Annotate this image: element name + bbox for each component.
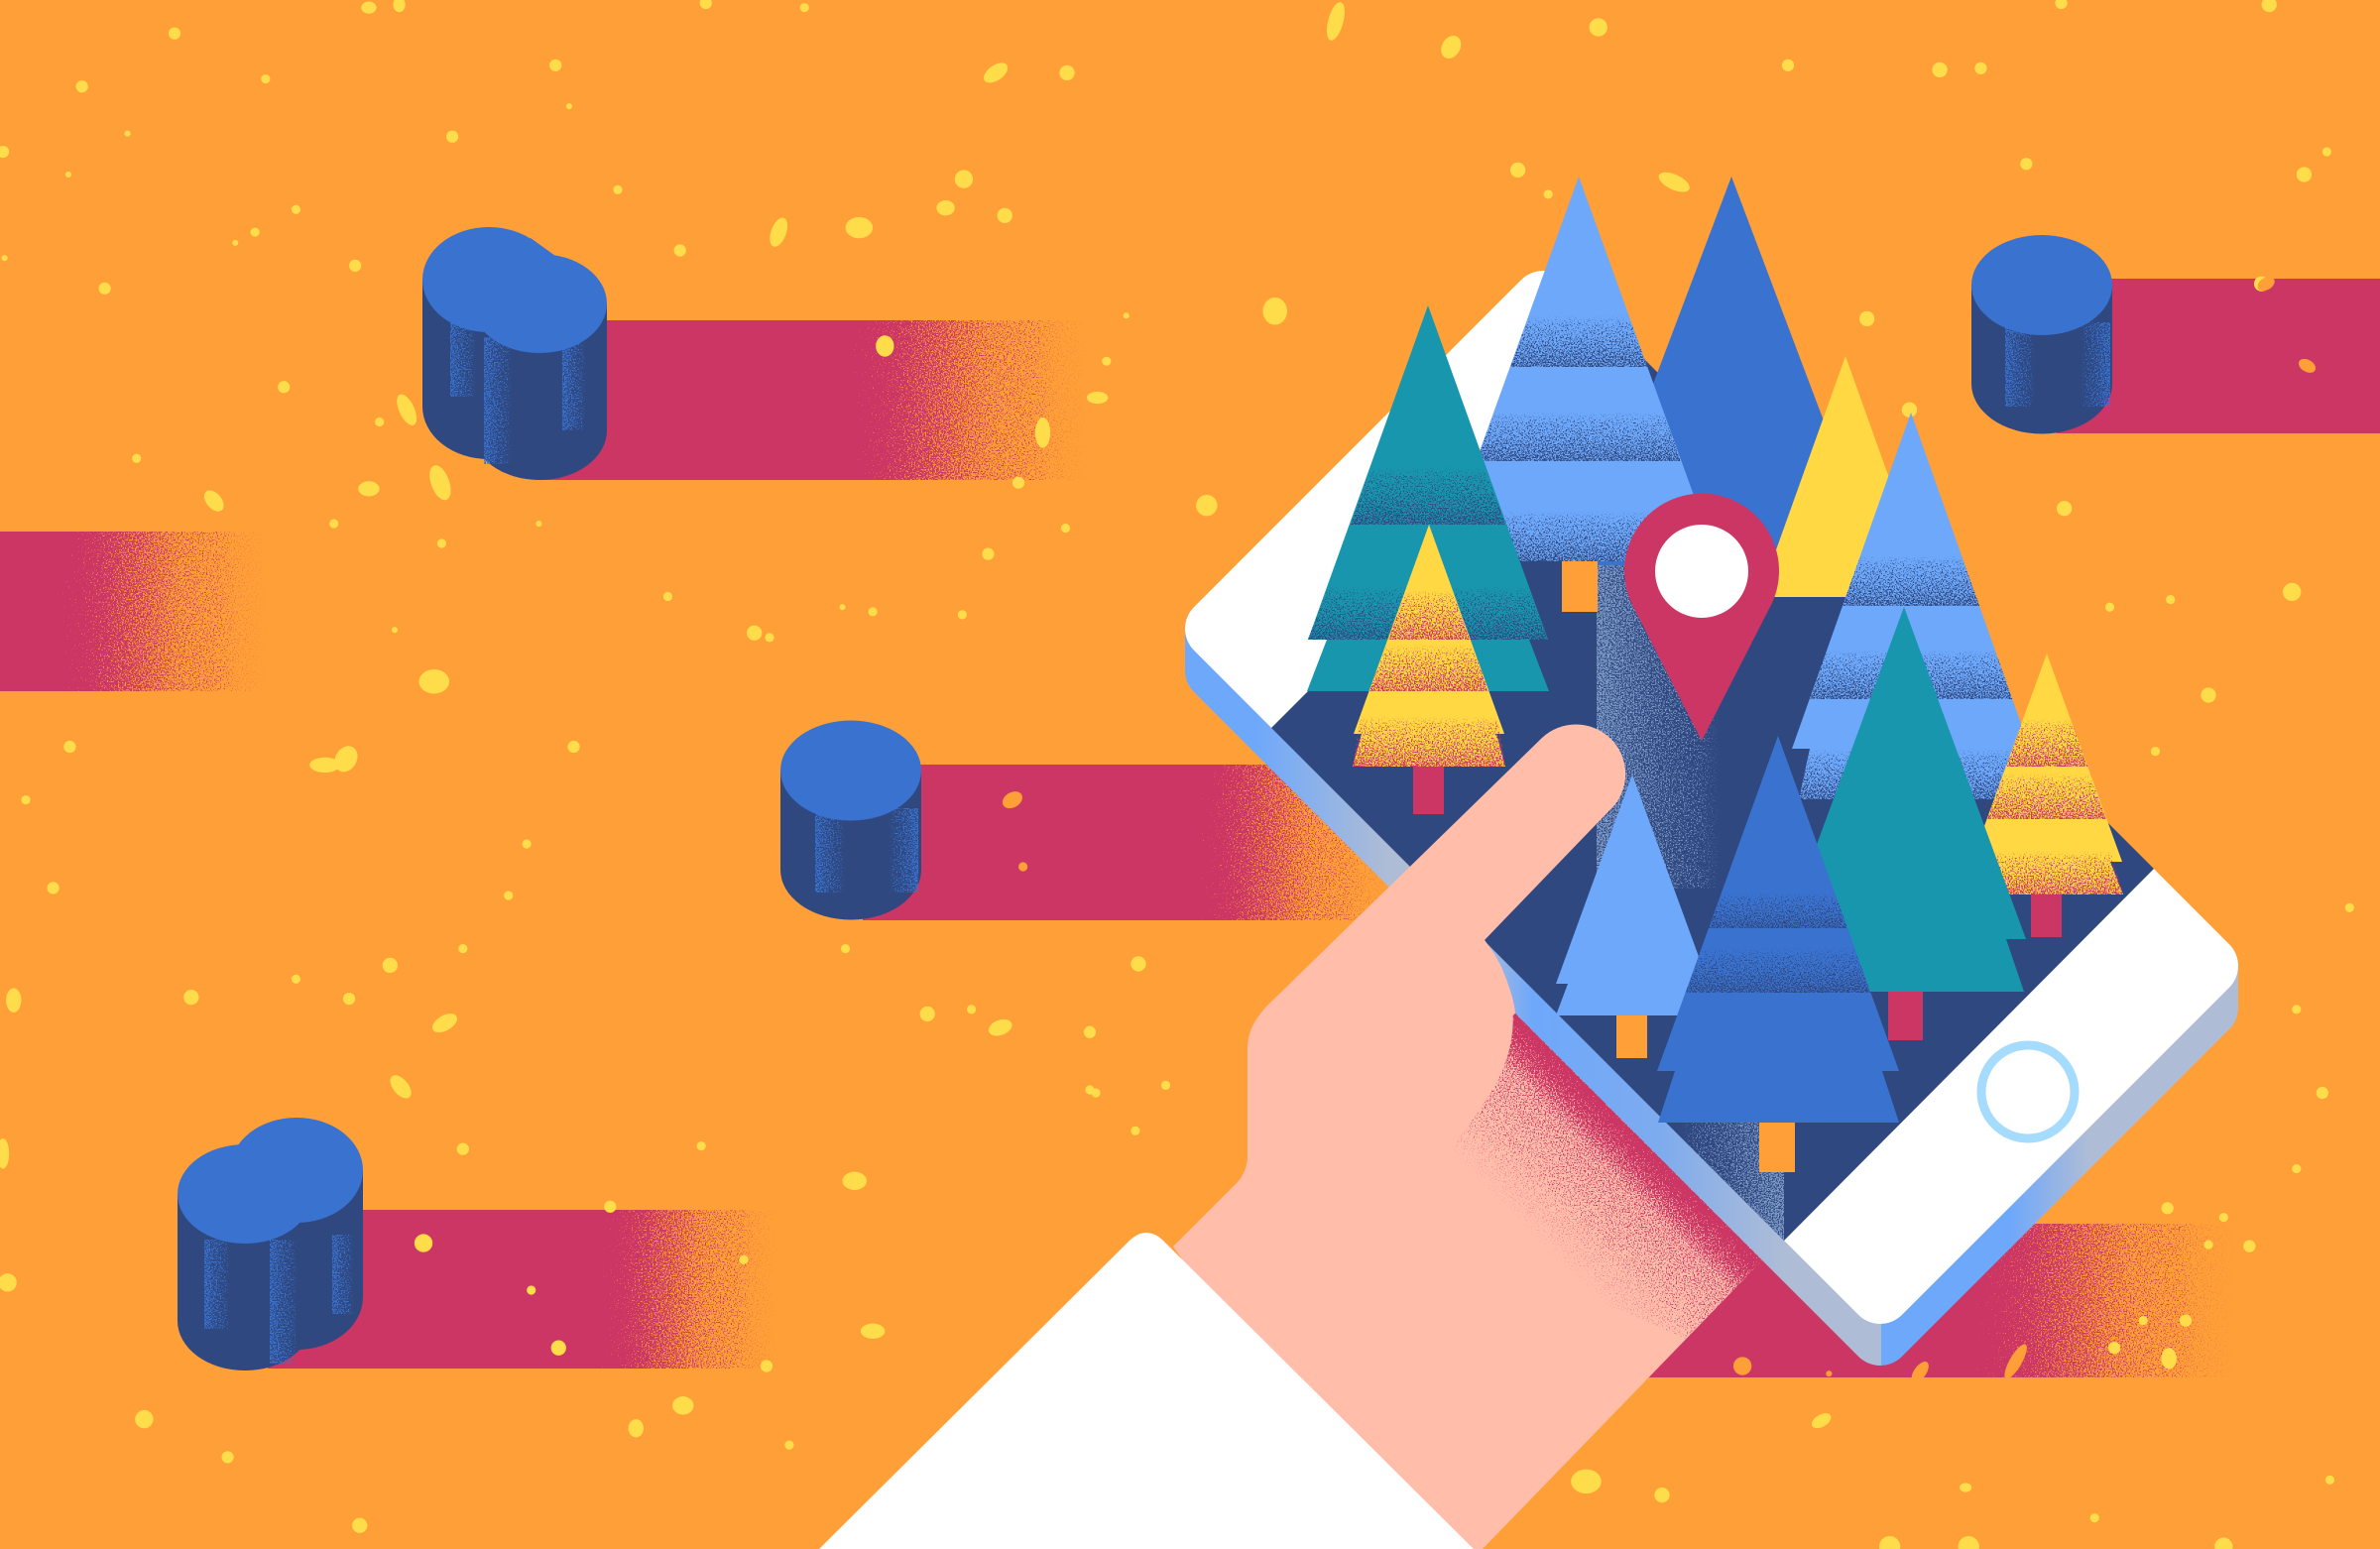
track: middle	[863, 765, 1391, 920]
tree: light blue small	[1556, 774, 1709, 1058]
track: far left	[0, 532, 268, 691]
phone side: right face	[1881, 942, 2238, 1366]
stump body	[422, 280, 607, 480]
stump top	[1971, 235, 2112, 335]
cylinder stump: upper right	[1971, 235, 2112, 434]
map pin	[1624, 494, 1779, 741]
pin body	[1624, 494, 1779, 741]
tree: blue tall back	[1585, 177, 1878, 565]
phone face	[1216, 301, 2207, 1293]
tree: yellow left	[1353, 525, 1505, 814]
thumb	[1319, 916, 1513, 1180]
sleeve	[819, 1233, 1474, 1549]
phone side: left face	[1185, 605, 1881, 1366]
tree: teal right	[1782, 607, 2026, 1040]
canopy	[1353, 525, 1505, 767]
tree: blue front	[1657, 736, 1899, 1172]
shading bands	[1353, 590, 1505, 767]
track: upper left	[536, 320, 1089, 480]
stump top	[422, 227, 607, 353]
trunk	[1759, 1123, 1795, 1172]
trunk	[1413, 767, 1444, 814]
hand base and finger	[1173, 725, 1762, 1549]
canopy	[1556, 774, 1709, 1015]
shading bands	[1686, 893, 1870, 993]
stump body	[780, 771, 921, 920]
phone	[1216, 301, 2207, 1335]
cylinder stump: upper left	[422, 227, 607, 480]
shading bands	[1970, 719, 2123, 894]
hand	[1173, 725, 1762, 1549]
stump highlights	[450, 317, 586, 464]
stump highlights	[204, 1235, 354, 1364]
home button	[1981, 1045, 2075, 1138]
canopy	[1307, 305, 1549, 691]
trunk	[2031, 894, 2062, 937]
tree: teal left	[1307, 305, 1549, 691]
shading bands	[1440, 315, 1718, 561]
phone screen	[1271, 357, 2154, 1241]
cylinder stump: lower left	[178, 1118, 363, 1370]
track: behind phone	[1646, 1224, 2236, 1377]
trunk	[1616, 1015, 1647, 1058]
stump highlights	[815, 808, 918, 893]
canopy	[1970, 654, 2123, 894]
track: upper right	[2057, 279, 2380, 433]
track: lower left	[268, 1210, 778, 1369]
shading bands	[1308, 466, 1548, 640]
canopy	[1657, 736, 1899, 1123]
cylinder stump: middle	[780, 720, 921, 920]
stump top	[780, 720, 921, 821]
canopy	[1782, 607, 2026, 992]
wrist shadow	[1388, 1013, 1762, 1339]
canopy	[1792, 413, 2030, 799]
trunk	[1888, 992, 1923, 1040]
pin hole	[1655, 525, 1748, 618]
trunk	[1562, 561, 1598, 612]
stump highlights	[2005, 322, 2110, 407]
stump body	[178, 1170, 363, 1370]
orange speckles on tracks	[1000, 274, 2319, 1385]
tree: yellow right	[1970, 654, 2123, 937]
tree: yellow back	[1759, 356, 1932, 597]
canopy	[1440, 177, 1718, 561]
tree: light blue back	[1440, 177, 1718, 612]
stump top	[178, 1118, 363, 1244]
crimson tracks	[0, 279, 2380, 1377]
shading bands	[1799, 555, 2023, 799]
stump body	[1971, 285, 2112, 434]
screen glow	[1597, 561, 1784, 1251]
tree: light blue right	[1792, 413, 2030, 799]
